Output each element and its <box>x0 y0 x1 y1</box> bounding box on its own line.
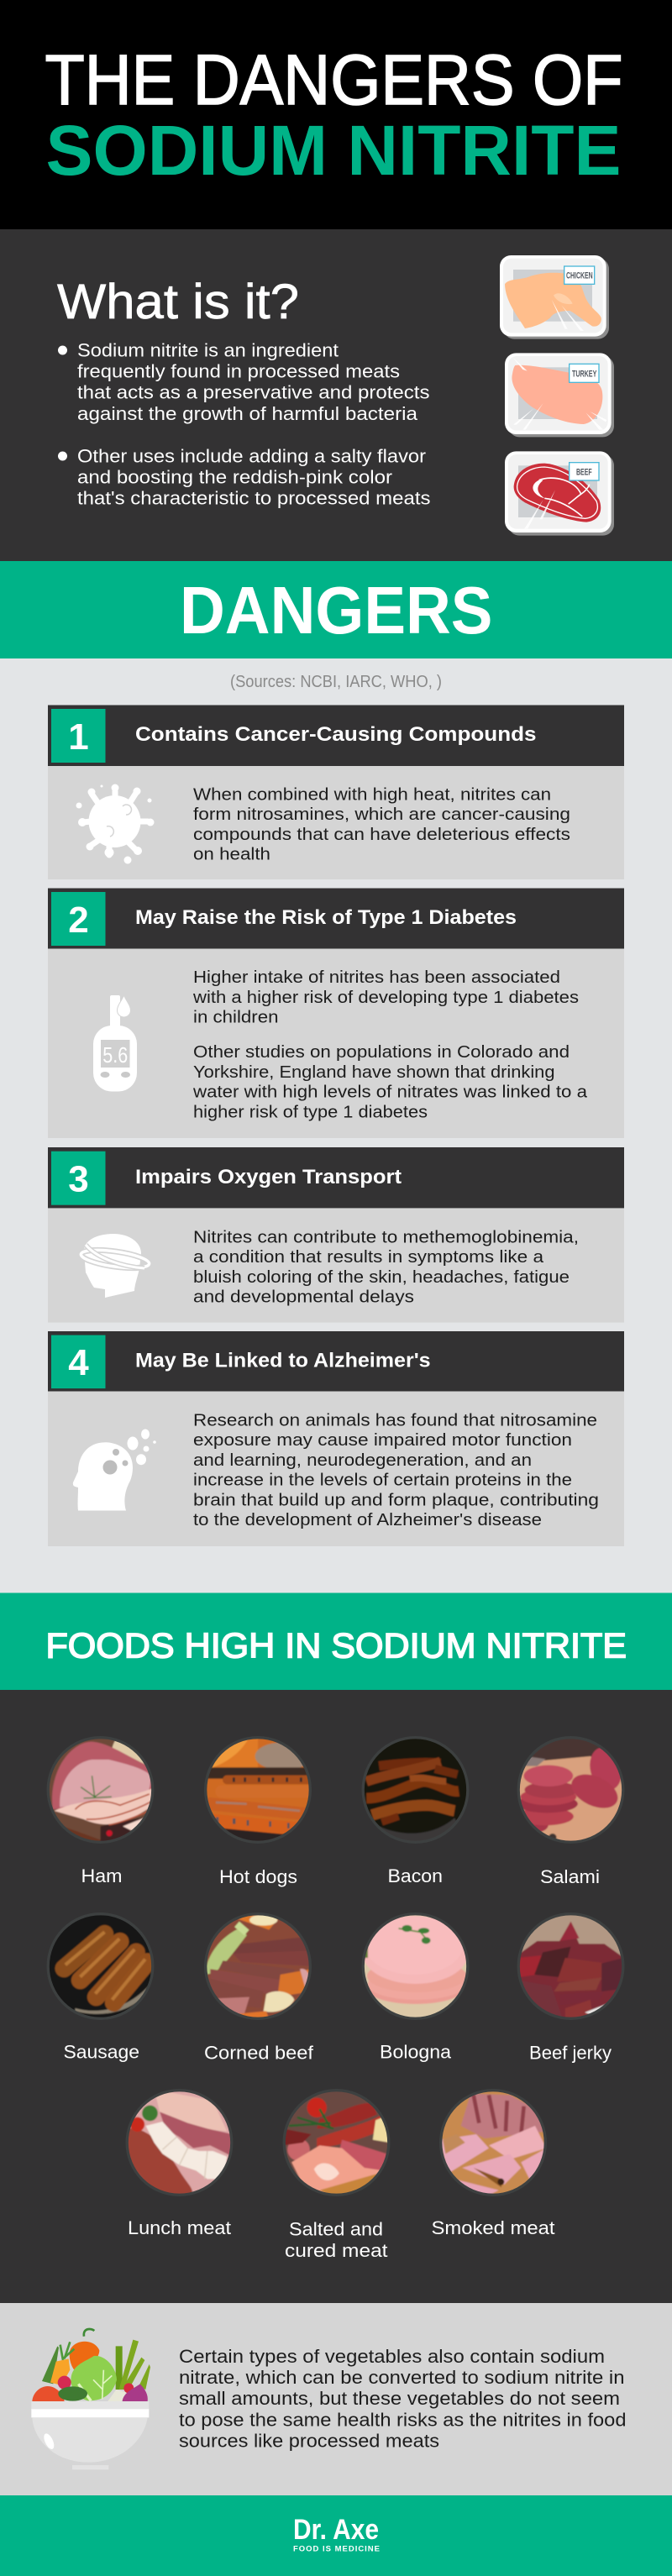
body text 1 <box>193 784 570 863</box>
label: salami: Salami <box>540 1866 600 1887</box>
icon: meat trays <box>500 255 614 536</box>
banner: foods heading: FOODS HIGH IN SODIUM NITRITE <box>45 1626 627 1666</box>
danger 1 <box>48 706 624 879</box>
number badge 1: 1 <box>68 716 89 758</box>
body text 4: brain that build up and form plaque, contributing <box>193 1490 599 1509</box>
food: salami <box>517 1736 627 1844</box>
panel: vegetables note <box>0 2303 672 2495</box>
logo: Dr. Axe: FOOD IS MEDICINE <box>293 2545 380 2553</box>
text: vegetables note: to pose the same health risks as the nitrites in food <box>179 2409 627 2430</box>
panel: dangers list <box>0 658 672 1593</box>
bullet list: Sodium nitrite is an ingredient <box>77 339 339 361</box>
body text 2: Yorkshire, England have shown that drinking <box>193 1062 554 1082</box>
body text 4: exposure may cause impaired motor function <box>193 1430 572 1450</box>
food: lunch meat <box>126 2089 234 2196</box>
bullet list: frequently found in processed meats <box>77 361 400 381</box>
number badge 1 <box>51 709 106 763</box>
banner: foods heading <box>0 1592 672 1690</box>
food: salted and cured meat <box>282 2089 390 2196</box>
icon: virus <box>76 784 155 863</box>
body text 4 <box>193 1411 599 1529</box>
food: bologna <box>361 1912 469 2020</box>
body text 1: on health <box>193 845 270 863</box>
bullet list: that acts as a preservative and protects <box>77 381 430 403</box>
footer <box>0 2495 672 2576</box>
body text 1: compounds that can have deleterious effects <box>193 825 570 844</box>
danger 3 <box>48 1147 624 1323</box>
food: corned beef <box>204 1912 312 2020</box>
food: beef jerky <box>517 1912 625 2020</box>
number badge 3: 3 <box>68 1159 89 1199</box>
icon: glucose meter <box>93 995 137 1092</box>
body text 2: in children <box>193 1008 279 1026</box>
number badge 4: 4 <box>68 1342 89 1383</box>
icon: chicken tray <box>500 255 609 339</box>
icon: turkey tray: TURKEY <box>572 369 596 379</box>
heading 2: May Raise the Risk of Type 1 Diabetes <box>135 906 517 929</box>
text: vegetables note: sources like processed meats <box>179 2431 439 2452</box>
body text 2: Higher intake of nitrites has been associated <box>193 968 560 987</box>
number badge 2: 2 <box>68 900 89 941</box>
body text 1: form nitrosamines, which are cancer-causing <box>193 805 570 824</box>
sources note: (Sources: NCBI, IARC, WHO, ) <box>230 673 442 691</box>
title line 1: THE DANGERS OF <box>45 40 623 119</box>
label: sausage: Sausage <box>64 2042 139 2063</box>
icon: turkey tray <box>505 353 614 437</box>
banner: dangers <box>0 561 672 658</box>
body text 2 <box>192 968 588 1121</box>
text: vegetables note <box>179 2346 627 2452</box>
label: lunch meat: Lunch meat <box>128 2217 231 2238</box>
number badge 3 <box>51 1152 106 1205</box>
heading 3: Impairs Oxygen Transport <box>135 1166 402 1188</box>
body text 2: water with high levels of nitrates was linked to a <box>192 1083 588 1102</box>
logo: Dr. Axe: Dr. Axe <box>293 2514 379 2546</box>
label: corned beef: Corned beef <box>204 2043 314 2064</box>
text: vegetables note: nitrate, which can be converted to sodium nitrite in <box>179 2367 625 2388</box>
icon: beef tray <box>505 451 614 536</box>
body text 3: Nitrites can contribute to methemoglobinemia, <box>193 1227 579 1246</box>
danger 4 <box>48 1331 624 1546</box>
banner: dangers: DANGERS <box>180 573 492 648</box>
food: bacon <box>361 1736 469 1844</box>
body text 4: to the development of Alzheimer's disease <box>193 1510 542 1529</box>
header banner <box>0 0 672 229</box>
heading 1: Contains Cancer-Causing Compounds <box>135 723 536 746</box>
heading: what is it: What is it? <box>57 275 299 329</box>
number badge 2 <box>51 892 106 946</box>
bullet list <box>58 339 430 509</box>
panel: what is it <box>0 229 672 561</box>
bullet list: and boosting the reddish-pink color <box>77 467 392 487</box>
label: hot dogs: Hot dogs <box>219 1866 297 1887</box>
label: salted and cured meat: Salted and <box>289 2219 383 2240</box>
body text 2: Other studies on populations in Colorado and <box>193 1042 570 1062</box>
bullet list: against the growth of harmful bacteria <box>77 403 418 424</box>
number badge 4 <box>51 1335 106 1388</box>
title line 2: SODIUM NITRITE <box>45 111 622 190</box>
body text 4: Research on animals has found that nitrosamine <box>193 1411 597 1430</box>
label: salted and cured meat: cured meat <box>285 2240 388 2261</box>
food: smoked meat <box>439 2089 547 2196</box>
body text 3: a condition that results in symptoms like a <box>193 1247 544 1267</box>
icon: chicken tray: CHICKEN <box>566 271 593 281</box>
label: beef jerky: Beef jerky <box>529 2043 612 2064</box>
panel: foods grid <box>0 1690 672 2303</box>
body text 2: higher risk of type 1 diabetes <box>193 1102 428 1121</box>
icon: head with plaques <box>73 1430 156 1510</box>
label: bologna: Bologna <box>380 2042 452 2063</box>
body text 3 <box>193 1227 579 1307</box>
icon: beef tray: BEEF <box>576 467 592 477</box>
food: hot dogs <box>204 1736 312 1844</box>
label: ham: Ham <box>81 1865 123 1886</box>
body text 3: bluish coloring of the skin, headaches, fatigue <box>193 1267 570 1287</box>
text: vegetables note: small amounts, but these vegetables do not seem <box>179 2388 620 2409</box>
body text 4: and learning, neurodegeneration, and an <box>193 1451 532 1470</box>
icon: vegetable bowl <box>31 2329 150 2469</box>
body text 1: When combined with high heat, nitrites can <box>193 784 551 804</box>
food: ham <box>47 1736 155 1844</box>
label: salted and cured meat <box>285 2219 388 2261</box>
label: smoked meat: Smoked meat <box>432 2217 554 2238</box>
body text 3: and developmental delays <box>193 1287 414 1307</box>
text: vegetables note: Certain types of vegetables also contain sodium <box>179 2346 605 2367</box>
danger 2 <box>48 889 624 1138</box>
icon: glucose meter: 5.6 <box>102 1042 128 1068</box>
bullet list: Other uses include adding a salty flavor <box>77 445 426 467</box>
label: bacon: Bacon <box>388 1865 443 1886</box>
icon: dizzy head <box>80 1234 150 1298</box>
body text 2: with a higher risk of developing type 1 diabetes <box>192 988 579 1007</box>
food: sausage <box>47 1912 155 2020</box>
heading 4: May Be Linked to Alzheimer's <box>135 1349 431 1372</box>
bullet list: that's characteristic to processed meats <box>77 487 430 509</box>
body text 4: increase in the levels of certain proteins in the <box>193 1471 572 1490</box>
